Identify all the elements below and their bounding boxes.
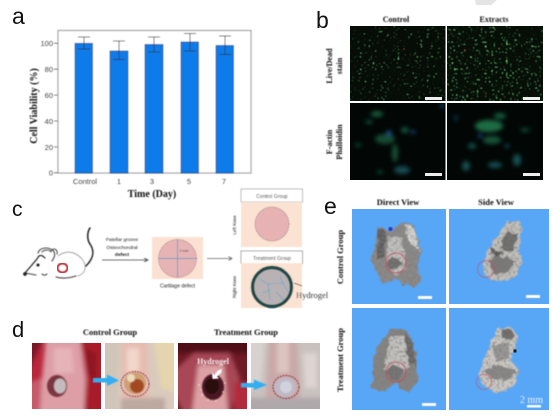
- micrograph: control f-actin: [350, 103, 446, 180]
- column headings: Extracts: [480, 15, 508, 24]
- x axis tick labels: 1: [117, 177, 121, 186]
- panel e headings: Control Group: [335, 230, 345, 284]
- procedure label: defect: [115, 252, 129, 258]
- x axis tick labels: 5: [187, 177, 191, 186]
- panel e headings: [335, 197, 515, 392]
- row headings: [325, 48, 344, 160]
- procedure label: Osteochondral: [106, 245, 138, 251]
- cartilage defect diagram: 2 mm: [180, 249, 188, 253]
- panel d headings: Control Group: [83, 327, 137, 337]
- x axis tick labels: 7: [222, 177, 226, 186]
- photo: control before: [32, 343, 101, 409]
- micro-CT: treatment direct view: [352, 308, 446, 410]
- y axis tick labels: 0: [49, 168, 53, 178]
- panel e headings: Direct View: [377, 197, 420, 207]
- photo: treatment after: [251, 343, 320, 409]
- photo: treatment before: [178, 343, 247, 409]
- panel e headings: Side View: [478, 197, 515, 207]
- column headings: Control: [383, 15, 410, 24]
- arrow: control before to after: [93, 374, 119, 386]
- cartilage defect diagram: Cartilage defect: [160, 284, 196, 290]
- treatment group diagram: Hydrogel: [296, 290, 329, 300]
- micro-CT: control direct view: [352, 209, 446, 304]
- y axis tick labels: 40: [45, 117, 53, 126]
- panel b: fluorescence microscopy grid: [325, 15, 543, 180]
- micrograph: extracts live/dead: [447, 26, 543, 101]
- y axis title: Cell Viability (%): [29, 68, 40, 144]
- panel d headings: Treatment Group: [214, 327, 278, 337]
- panel label c: c: [12, 198, 22, 221]
- cartilage defect diagram: [152, 237, 203, 290]
- panel label d: d: [12, 317, 24, 342]
- treatment group diagram: Right Knee: [232, 275, 237, 298]
- row headings: stain: [335, 57, 344, 74]
- bars: [75, 42, 234, 173]
- icon: red defect ring on mouse knee: [58, 264, 68, 272]
- hydrogel annotation with white arrow: Hydrogel: [197, 357, 230, 366]
- y axis tick labels: 20: [45, 143, 53, 152]
- arrow: defect to groups: [207, 256, 232, 260]
- treatment group diagram: [232, 251, 329, 308]
- x axis tick labels: Control: [73, 177, 97, 186]
- panel e headings: Treatment Group: [335, 328, 345, 392]
- row headings: Phalloidin: [335, 124, 344, 160]
- procedure label: Patellar groove: [106, 237, 138, 243]
- icon: mouse illustration: [24, 228, 93, 278]
- treatment group diagram: Treatment Group: [253, 256, 291, 262]
- micrograph: extracts f-actin: [447, 103, 543, 180]
- micro-CT: control side view: [449, 209, 549, 304]
- panel a: cell viability bar chart: [29, 30, 251, 200]
- micrograph: control live/dead: [350, 26, 446, 101]
- micro-CT: treatment side view: [449, 308, 549, 410]
- panel label e: e: [324, 193, 337, 219]
- photo: control after: [105, 343, 174, 409]
- column headings: [383, 15, 508, 24]
- arrow: treatment before to after: [241, 380, 267, 390]
- panel label b: b: [316, 7, 329, 33]
- y axis tick labels: 80: [45, 65, 53, 74]
- decorative grey mark: [475, 0, 497, 5]
- hydrogel annotation with white arrow: [197, 357, 230, 379]
- error bars: [54, 34, 231, 173]
- micro-CT: treatment side view: 2 mm: [520, 395, 543, 406]
- y axis tick labels: [40, 39, 53, 178]
- x axis tick labels: [73, 177, 226, 186]
- x axis tick labels: 3: [150, 177, 154, 186]
- y axis tick labels: 100: [40, 39, 53, 48]
- panel d headings: [83, 327, 278, 337]
- row headings: Live/Dead: [325, 48, 334, 84]
- chart frame: [58, 30, 251, 173]
- control group diagram: [232, 189, 302, 247]
- panel label a: a: [12, 3, 25, 29]
- procedure label: [106, 237, 138, 258]
- x axis title: Time (Day): [128, 189, 176, 200]
- control group diagram: Left Knee: [232, 215, 237, 235]
- control group diagram: Control Group: [256, 194, 288, 200]
- arrow: mouse to defect: [102, 258, 148, 262]
- row headings: F-actin: [325, 129, 334, 154]
- y axis tick labels: 60: [45, 91, 53, 100]
